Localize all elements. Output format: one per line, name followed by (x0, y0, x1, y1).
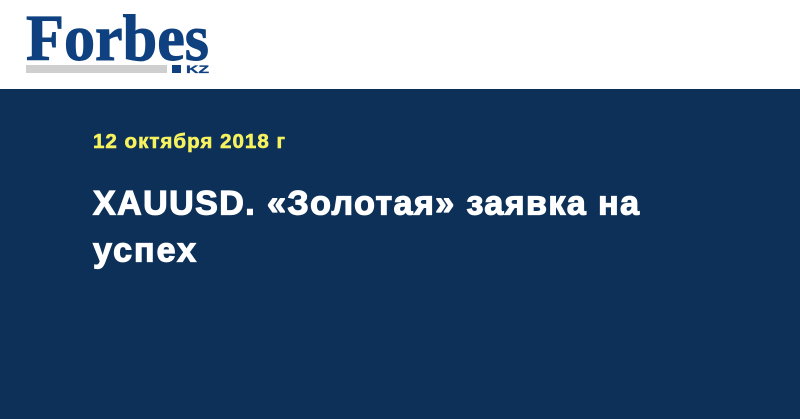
header panel (0, 0, 800, 89)
title (93, 184, 640, 270)
date: 12 октября 2018 г (93, 130, 285, 153)
title line 1: XAUUSD. «Золотая» заявка на (93, 184, 640, 222)
logo grey bar (26, 65, 167, 73)
logo KZ label: KZ (186, 64, 209, 76)
logo square (172, 65, 181, 73)
logo: Forbes KZ (26, 2, 209, 76)
logo wordmark: Forbes (26, 2, 209, 75)
title line 2: успех (93, 232, 196, 270)
main background panel (0, 89, 800, 419)
